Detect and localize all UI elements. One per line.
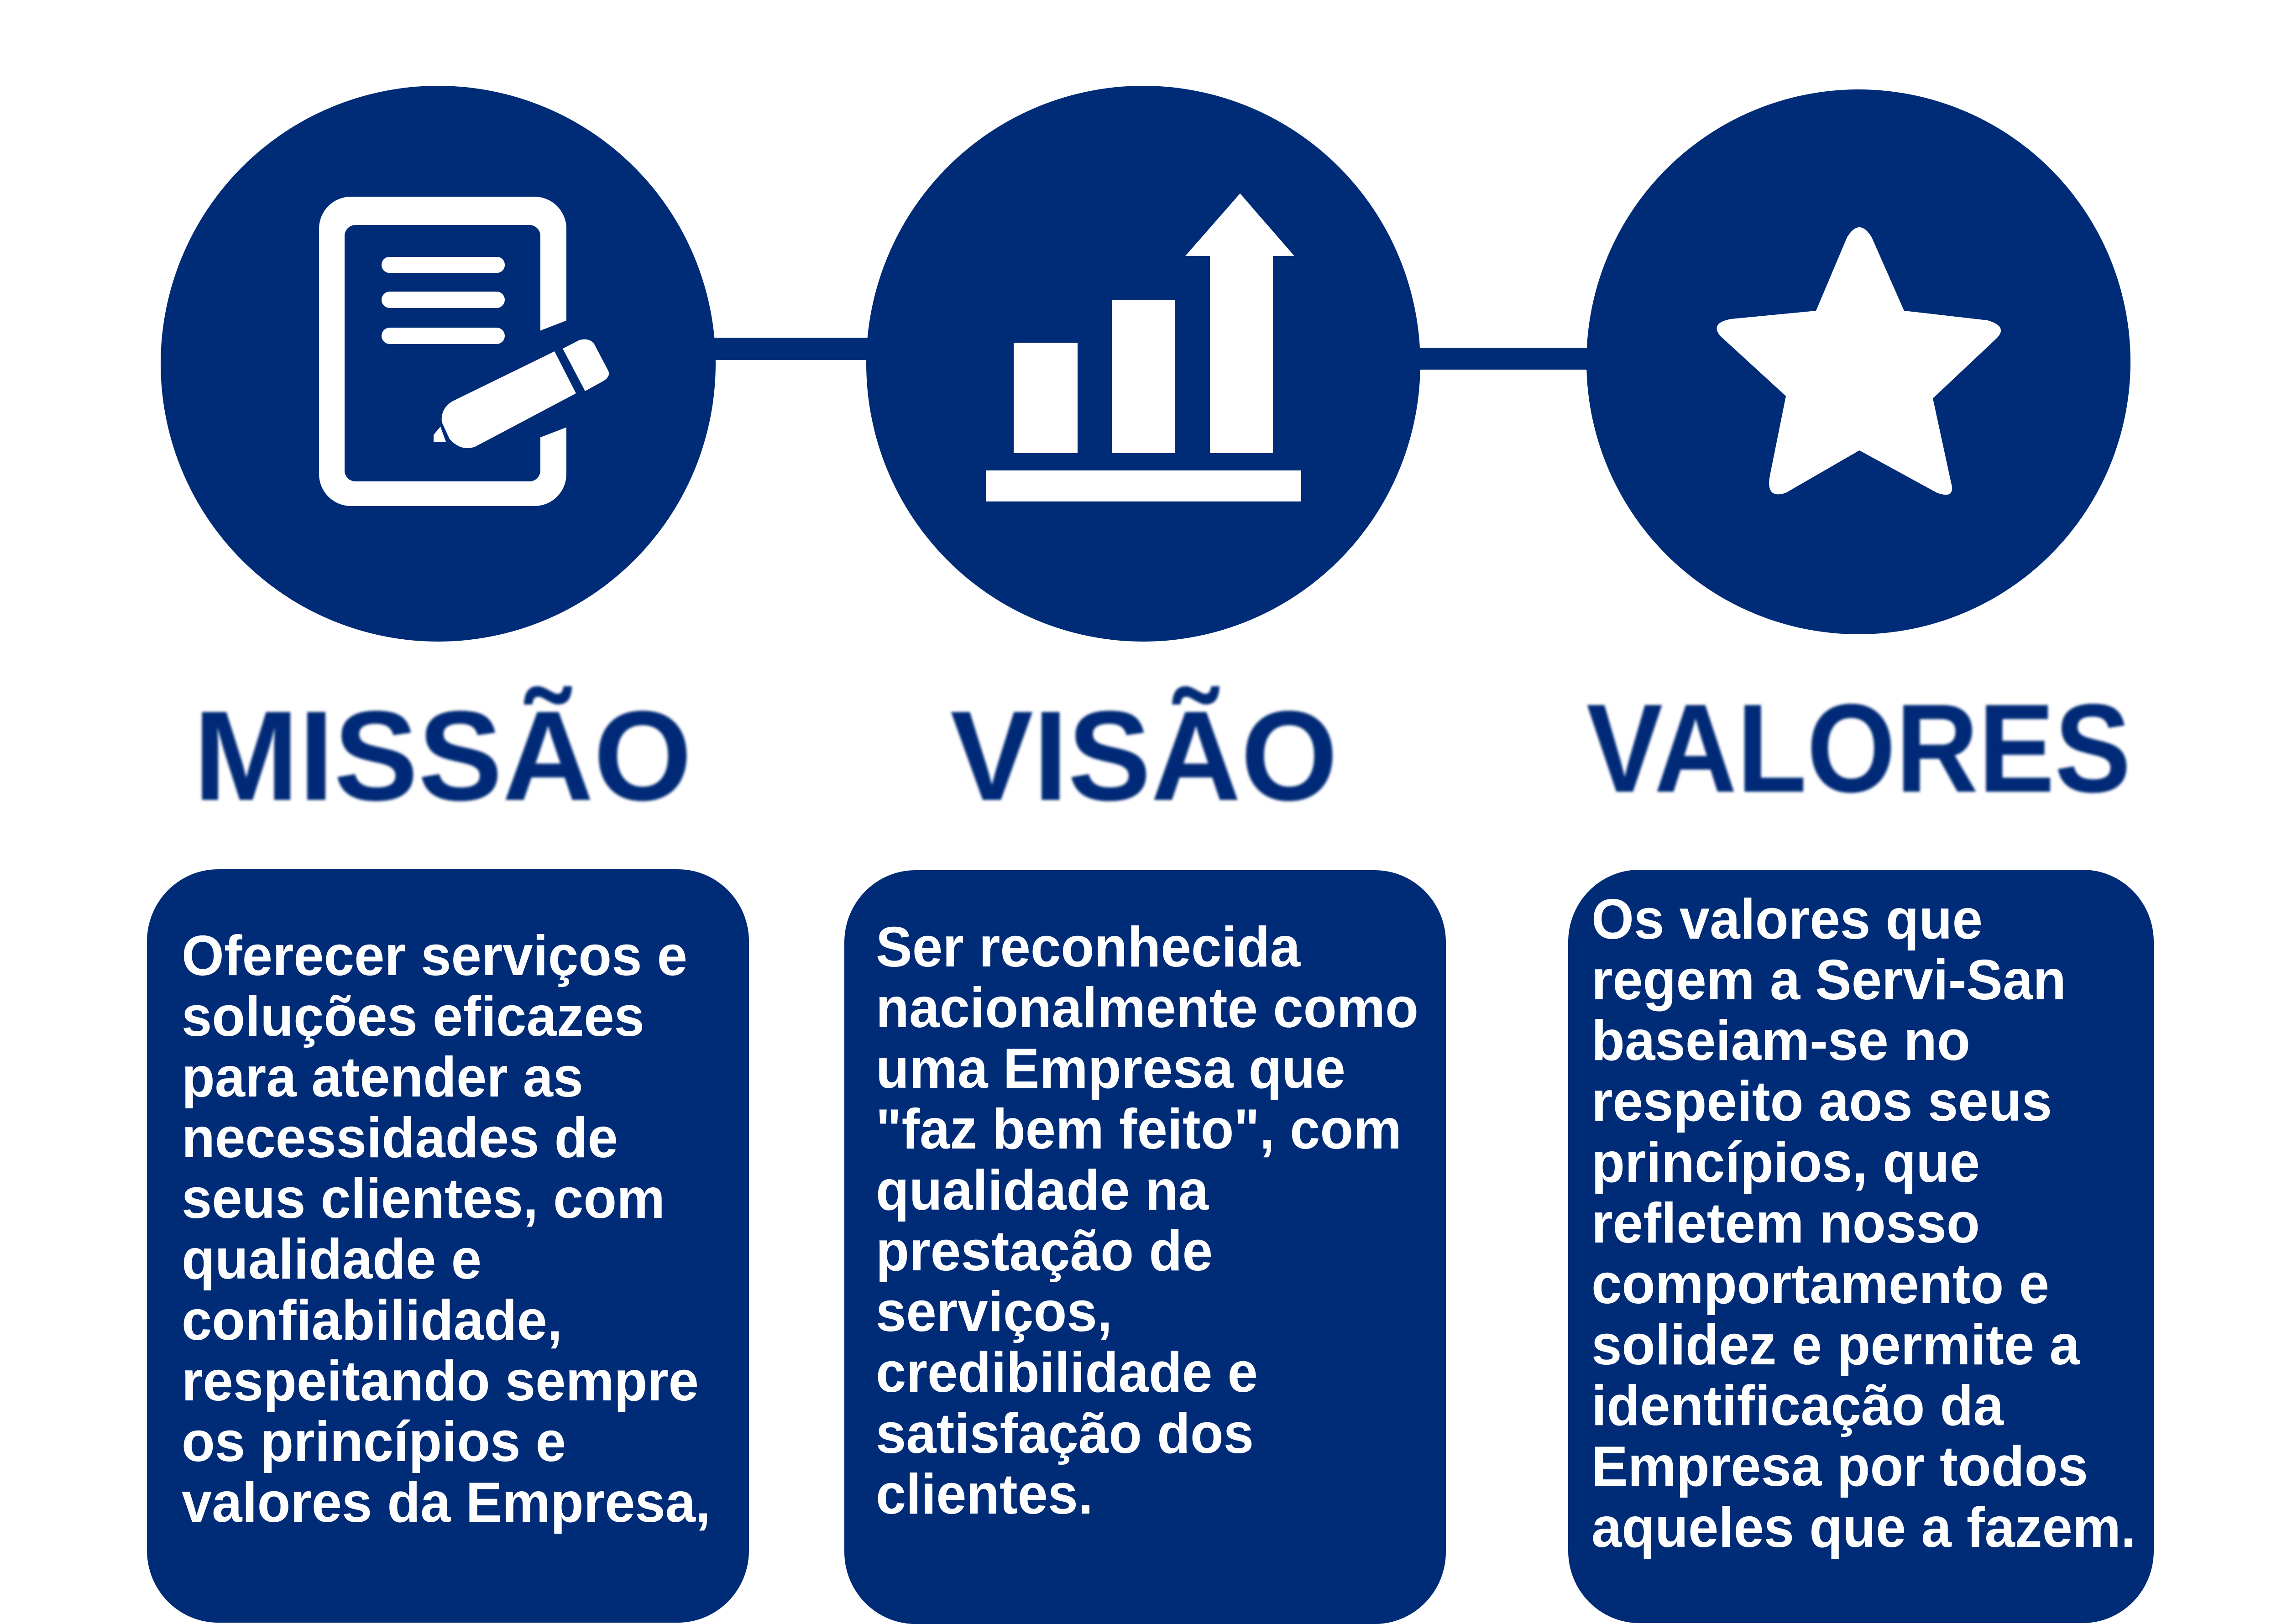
circle icon: valores star [1586,89,2130,634]
text block: valores [1591,888,2136,1559]
panel: missão [147,869,749,1623]
text block: visão: "faz bem feito", com [876,1098,1402,1161]
text block: missão: confiabilidade, [182,1289,562,1352]
text block: valores: baseiam-se no [1591,1009,1970,1072]
text block: missão: seus clientes, com [182,1167,665,1230]
text block: missão: respeitando sempre [182,1350,699,1413]
text block: visão: Ser reconhecida [876,916,1301,979]
heading: VISÃO: VISÃO [950,685,1338,827]
text block: missão [182,924,711,1534]
text block: visão: uma Empresa que [876,1037,1345,1100]
text block: missão: Oferecer serviços e [182,924,687,987]
text block: visão: credibilidade e [876,1341,1258,1404]
text block: missão: soluções eficazes [182,985,644,1048]
connector: missão to visão [707,338,876,360]
heading: MISSÃO: MISSÃO [194,685,692,827]
text block: valores: respeito aos seus [1591,1070,2052,1133]
panel: valores [1568,870,2154,1623]
connector: visão to valores [1410,348,1593,370]
text block: valores: identificação da [1591,1374,2004,1437]
heading: VALORES: VALORES [1586,678,2131,819]
text block: valores: comportamento e [1591,1253,2049,1316]
text block: visão: qualidade na [876,1159,1209,1222]
text block: valores: Os valores que [1591,888,1983,951]
text block: valores: refletem nosso [1591,1192,1980,1255]
text block: missão: para atender as [182,1046,583,1109]
text block: valores: aqueles que a fazem. [1591,1496,2136,1559]
text block: valores: Empresa por todos [1591,1435,2088,1498]
text block: visão: serviços, [876,1280,1112,1343]
text block: missão: necessidades de [182,1107,618,1170]
text block: visão [876,916,1418,1526]
text block: valores: regem a Servi-San [1591,949,2066,1012]
text block: valores: princípios, que [1591,1131,1980,1194]
text block: visão: satisfação dos [876,1402,1254,1465]
text block: visão: nacionalmente como [876,976,1418,1039]
circle icon: missão document and pencil [161,86,716,642]
text block: missão: qualidade e [182,1228,482,1291]
panel: visão [844,870,1446,1624]
text block: visão: prestação de [876,1220,1213,1283]
text block: valores: solidez e permite a [1591,1314,2080,1377]
text block: missão: os princípios e [182,1410,566,1473]
text block: visão: clientes. [876,1463,1093,1526]
text block: missão: valores da Empresa, [182,1471,711,1534]
circle icon: visão bar chart with arrow [866,86,1420,642]
